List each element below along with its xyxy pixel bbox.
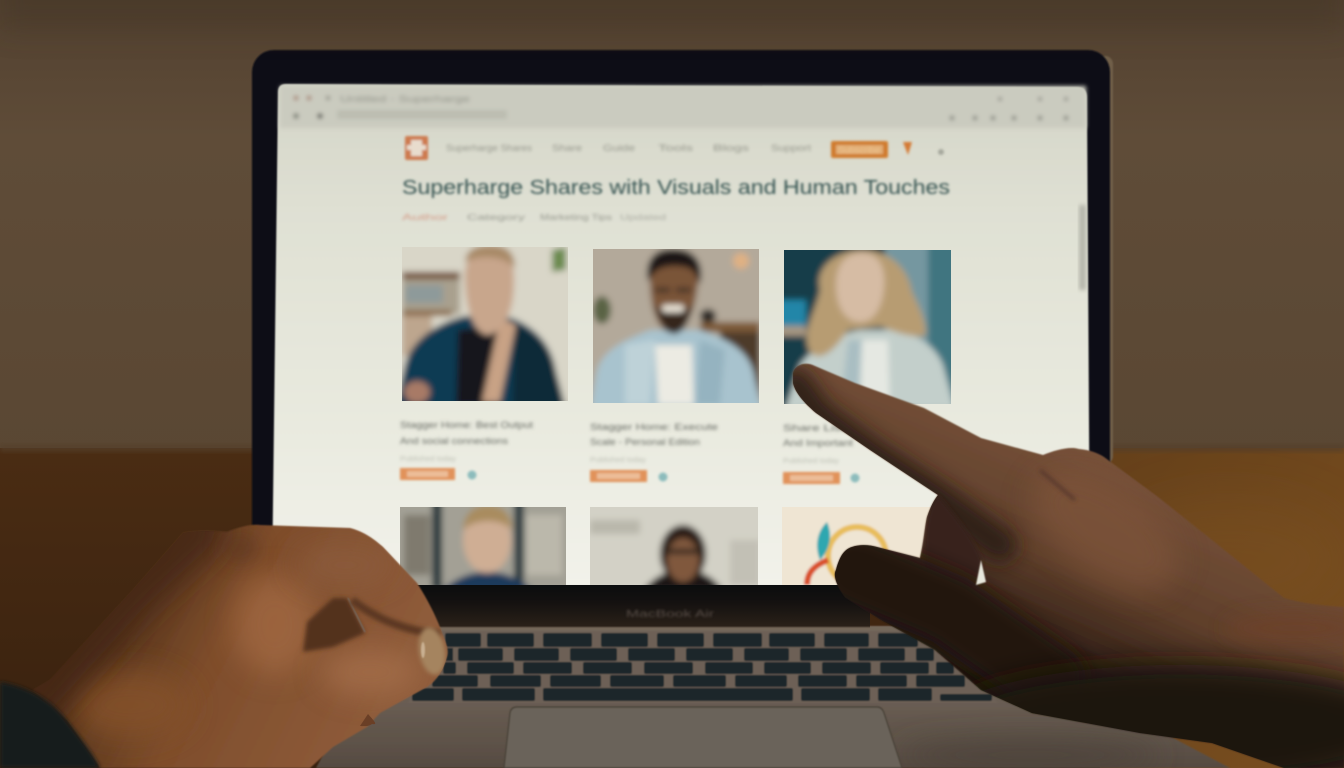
laptop logo text: MacBook Air <box>626 609 715 620</box>
background: wall <box>0 0 1344 460</box>
thumbnail <box>417 626 448 676</box>
keys <box>412 633 992 701</box>
card 1 tag and dot <box>400 468 476 480</box>
background: desk <box>0 444 1344 768</box>
gap showing screen <box>976 560 986 585</box>
card 1 text: And social connections <box>400 436 508 447</box>
byline <box>402 213 666 222</box>
byline: Author <box>402 213 449 222</box>
byline: Updated <box>620 213 666 222</box>
browser toolbar: Untitled - Superharge <box>340 94 470 104</box>
card 3 text <box>783 423 863 465</box>
header button: Subscribe <box>838 145 880 155</box>
browser toolbar <box>280 86 1086 128</box>
site header: navigation: Tools <box>658 143 694 153</box>
finger gap <box>303 598 365 652</box>
laptop base <box>316 626 1230 768</box>
laptop lid <box>252 50 1113 610</box>
byline: Marketing Tips <box>540 213 612 222</box>
card 5 photo: person with glasses, bottom row <box>590 507 758 585</box>
laptop screen <box>272 84 1090 593</box>
scrollbar <box>1079 205 1086 290</box>
card 4 photo: blond man, bottom row <box>400 507 566 585</box>
left hand <box>30 525 449 768</box>
card 2 text: Published today <box>590 457 647 464</box>
card 2 photo: smiling man with glasses <box>593 249 759 403</box>
keyboard <box>408 631 998 703</box>
card 3 tag and dot <box>783 472 860 484</box>
site header: navigation: Superharge Shares <box>446 143 533 153</box>
site header: navigation: Support <box>771 143 812 153</box>
index finger underside <box>352 600 440 634</box>
left hand shading <box>30 530 420 740</box>
site header: navigation: Share <box>552 143 582 153</box>
hand highlight <box>1035 480 1176 593</box>
top vignette <box>0 0 1344 30</box>
trackpad <box>504 707 902 768</box>
card 1 text: Published today <box>400 456 457 463</box>
site header: logo <box>405 136 428 160</box>
card 3 text: And Important <box>783 438 853 449</box>
thumb and palm shadow <box>855 570 1050 680</box>
left sleeve <box>0 682 100 768</box>
desk glow <box>1110 500 1344 620</box>
card 6 graphic: colourful arcs <box>782 507 930 585</box>
card 2 text: Stagger Home: Execute <box>590 422 718 433</box>
card 3 text: Published today <box>783 458 840 465</box>
card 3 text: Share Listing <box>783 423 863 434</box>
card 2 text: Scale - Personal Edition <box>590 437 700 448</box>
site header: navigation: Blogs <box>713 143 750 153</box>
hinge and lid chin <box>380 585 930 632</box>
card 1 text <box>400 420 533 463</box>
right hand <box>793 364 1344 768</box>
header icons <box>903 142 944 155</box>
card 2 text <box>590 422 718 464</box>
card 3 photo: woman with curly hair <box>784 250 951 404</box>
wrist highlight <box>1225 612 1344 644</box>
index finger underside <box>795 385 1000 545</box>
card 2 tag and dot <box>590 470 668 482</box>
knuckle crease <box>1040 470 1075 500</box>
middle finger <box>924 495 982 590</box>
site header: navigation: Guide <box>603 143 635 153</box>
headline: Superharge Shares with Visuals and Human Touches <box>402 177 950 199</box>
header button <box>831 141 888 158</box>
wrist shadow <box>940 665 1344 768</box>
byline: Category <box>467 213 525 222</box>
card 1 text: Stagger Home: Best Output <box>400 420 533 431</box>
site header: navigation <box>446 143 812 153</box>
keyboard well <box>408 631 998 703</box>
pinky tip <box>360 714 375 726</box>
card 1 photo: man in navy jacket <box>402 247 568 401</box>
